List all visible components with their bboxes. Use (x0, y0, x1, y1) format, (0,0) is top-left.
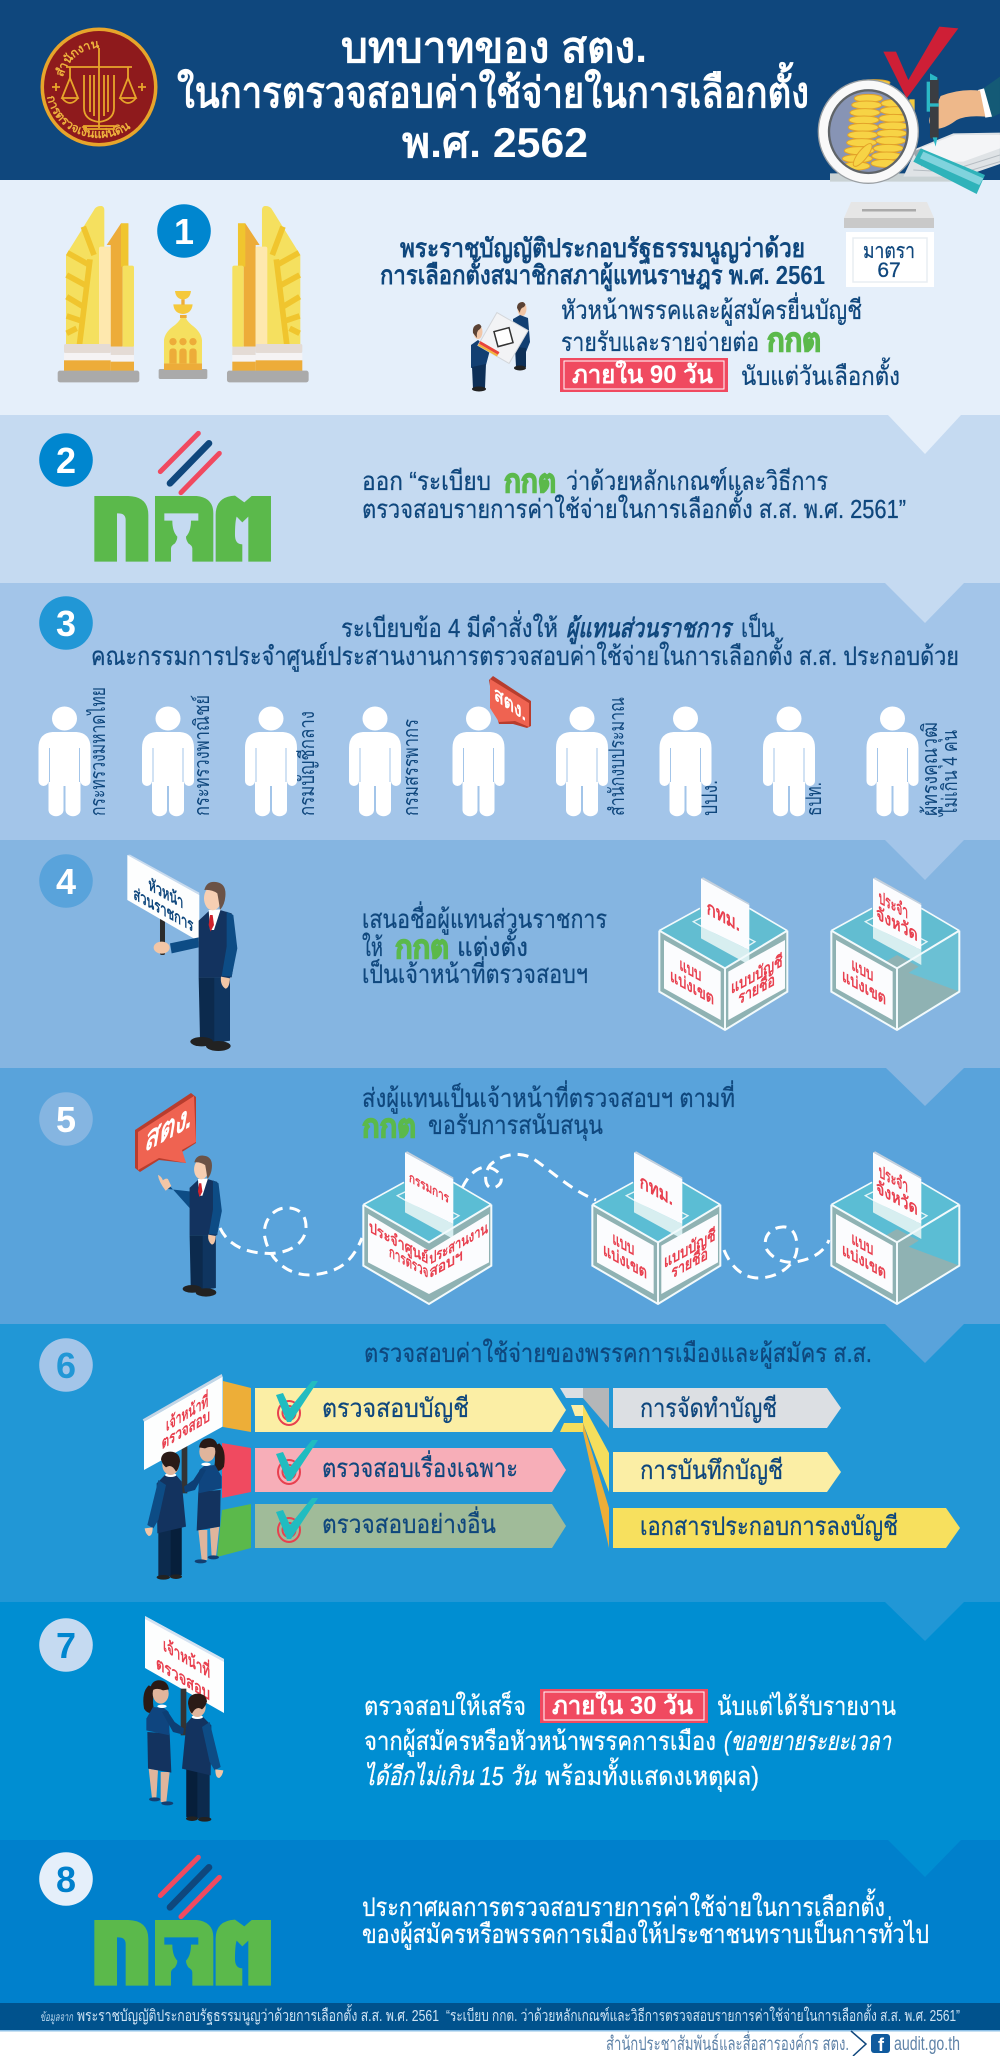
member: Budget Bureau (556, 697, 629, 816)
panel: step 5 background (0, 1068, 1000, 1324)
icon: ECT logo with flag (94, 1857, 271, 1986)
icon: centre tower (159, 291, 207, 379)
row: supporting documents: เอกสารประกอบการลงบัญชี (640, 1511, 898, 1541)
text: left face constituency (842, 954, 886, 1009)
text: province paper: ประจำ (879, 887, 908, 923)
icon: green tab (217, 1504, 251, 1557)
panel: step 2 content (39, 433, 906, 562)
arrow: step 1 to 2 (888, 415, 961, 454)
panel: step 1 content (58, 202, 934, 392)
icon: ECT inline logo: กกต (767, 322, 821, 358)
icon: number 7: 7 (56, 1625, 76, 1666)
icon: number 7 (39, 1618, 93, 1672)
row: recording: การบันทึกบัญชี (640, 1455, 783, 1485)
row: bookkeeping: การจัดทำบัญชี (640, 1393, 777, 1423)
text: left face constituency: แบบ (851, 1228, 873, 1259)
illustration: man holding sign (127, 855, 237, 1051)
member: Revenue Department (349, 706, 423, 816)
text: coordination centre faces: ประจำศูนย์ (369, 1217, 428, 1270)
text: left face constituency (842, 1228, 886, 1283)
text: nominate representatives (362, 901, 607, 989)
text: province paper (876, 1161, 918, 1219)
heading: act title: การเลือกตั้งสมาชิกสภาผู้แทนราษฎร พ.ศ. 2561 (380, 255, 825, 292)
text: sign officers: ตรวจสอบ (162, 1406, 210, 1453)
arrow: dashed path officer to centre box (220, 1208, 362, 1275)
icon: facebook (871, 2034, 890, 2055)
text: sources: พระราชบัญญัติประกอบรัฐธรรมนูญว่าด้วยการเลือกตั้ง ส.ส. พ.ศ. 2561 (77, 2004, 439, 2026)
heading: committee composition: เป็น (741, 612, 775, 643)
icon: speech bubble SAO (489, 676, 531, 728)
arrow: chevron divider (851, 2031, 866, 2056)
row: recording (613, 1452, 841, 1492)
text: complete audit: ตรวจสอบให้เสร็จ (364, 1690, 526, 1721)
heading: act title: พระราชบัญญัติประกอบรัฐธรรมนูญว่าด้วย (400, 233, 805, 266)
panel: step 3 background (0, 583, 1000, 840)
text: left face constituency: แบบ (679, 954, 701, 985)
icon: ballot box Bangkok (592, 1151, 720, 1304)
text: sign head of agency (133, 874, 194, 936)
panel: credit strip (0, 2030, 1000, 2056)
text: send representatives: ขอรับการสนับสนุน (428, 1110, 603, 1141)
text: submission requirement: หัวหน้าพรรคและผู้สมัครยื่นบัญชี (561, 292, 862, 326)
icon: magnifier over coins, check mark and hand (818, 27, 1000, 194)
icon: speech bubble SAO: สตง. (144, 1098, 192, 1159)
text: complete audit (364, 1690, 896, 1792)
icon: number 1: 1 (174, 211, 194, 252)
title: พ.ศ. 2562 (402, 119, 588, 166)
icon: two people exchanging documents (471, 302, 530, 392)
panel: step 2 background (0, 415, 1000, 583)
row: account audit: ตรวจสอบบัญชี (322, 1393, 469, 1423)
text: complete audit: จากผู้สมัครหรือหัวหน้าพรรคการเมือง (364, 1726, 716, 1757)
text: ECT regulation (362, 463, 906, 524)
text: Bangkok paper: กทม. (640, 1171, 673, 1210)
arrow: dashed path centre box to Bangkok box (462, 1154, 596, 1200)
text: complete audit: พร้อมทั้งแสดงเหตุผล) (545, 1757, 759, 1792)
illustration: SAO officer (158, 1156, 222, 1297)
text: right face party list: รายชื่อ (671, 1241, 708, 1282)
icon: ballot box province (831, 877, 959, 1030)
member: Bank of Thailand: ธปท. (803, 782, 826, 816)
icon: ballot box coordination centre (363, 1151, 491, 1304)
text: province paper (876, 887, 918, 945)
text: coordination centre faces: สอบฯ (429, 1247, 463, 1282)
text: nominate representatives: เป็นเจ้าหน้าที่ตรวจสอบฯ (362, 956, 588, 989)
text: send representatives: ส่งผู้แทนเป็นเจ้าหน้าที่ตรวจสอบฯ ตามที่ (362, 1080, 735, 1114)
text: Bangkok paper: กทม. (707, 897, 740, 936)
member: Revenue Department: กรมสรรพากร (400, 719, 423, 816)
icon: ballot box article 67: มาตรา (863, 240, 915, 263)
arrow: step 2 to 3 (885, 583, 964, 623)
text: ECT regulation: ออก “ระเบียบ (362, 466, 491, 496)
icon: number 2 (39, 433, 93, 487)
member: Bank of Thailand (763, 706, 826, 816)
heading: committee composition: ผู้แทนส่วนราชการ (566, 613, 734, 645)
title (177, 24, 809, 166)
icon: orange tab (223, 1381, 251, 1432)
text: complete audit: นับแต่ได้รับรายงาน (717, 1691, 896, 1721)
icon: number 3 (39, 596, 93, 650)
icon: target and check (276, 1381, 318, 1425)
callout: within 30 days: ภายใน 30 วัน (552, 1690, 693, 1720)
icon: ECT inline logo: กกต (504, 463, 556, 499)
icon: officers sign (145, 1616, 224, 1713)
text: coordination centre faces: ประสานงาน (429, 1219, 488, 1268)
icon: number 4 (39, 854, 93, 908)
text: submission requirement (561, 292, 900, 391)
text: left face constituency: แบ่งเขต (842, 966, 886, 1009)
text: left face constituency: แบบ (612, 1228, 634, 1259)
panel: step 6 background (0, 1324, 1000, 1602)
text: office credit: สำนักประชาสัมพันธ์และสื่อสารองค์กร สตง. (606, 2030, 849, 2055)
member: experts: ไม่เกิน 4 คน (938, 730, 962, 818)
text: province paper: ประจำ (879, 1161, 908, 1197)
row: supporting documents (613, 1508, 960, 1548)
icon: target and check (276, 1440, 318, 1484)
text: committee paper: กรรมการ (409, 1170, 449, 1207)
icon: number 1 (157, 204, 211, 258)
member: AMLO: ปปง. (699, 780, 722, 816)
icon: number 3: 3 (56, 603, 76, 644)
icon: ballot box article 67: 67 (877, 259, 901, 282)
text: right face party list: แบบบัญชี (731, 951, 783, 999)
icon: number 2: 2 (56, 440, 76, 481)
member: State Audit Office (452, 676, 531, 816)
member: Ministry of Commerce: กระทรวงพาณิชย์ (190, 695, 214, 816)
heading: committee composition: ระเบียบข้อ 4 มีคำสั่งให้ (341, 610, 558, 643)
row: account audit (255, 1381, 566, 1432)
text: province paper: จังหวัด (876, 902, 918, 945)
text: announce results: ประกาศผลการตรวจสอบรายการค่าใช้จ่ายในการเลือกตั้ง (362, 1888, 885, 1922)
icon: facebook: f (878, 2035, 885, 2055)
heading: act title (380, 233, 825, 292)
text: coordination centre faces (369, 1217, 488, 1282)
icon: number 6: 6 (56, 1345, 76, 1386)
row: specific audit: ตรวจสอบเรื่องเฉพาะ (322, 1450, 518, 1483)
icon: ballot box province (831, 1151, 959, 1304)
icon: number 5: 5 (56, 1099, 76, 1140)
text: nominate representatives: ให้ (362, 932, 383, 962)
icon: speech bubble SAO (135, 1093, 196, 1172)
arrow: step 7 to 8 (888, 1840, 961, 1877)
arrow: step 4 to 5 (886, 1068, 964, 1106)
member: Budget Bureau: สำนักงบประมาณ (606, 697, 629, 816)
text: submission requirement: นับแต่วันเลือกตั้ง (741, 357, 900, 391)
text: left face constituency: แบ่งเขต (842, 1240, 886, 1283)
text: sign officers (162, 1388, 210, 1453)
member: Comptroller General (245, 706, 319, 816)
panel: step 6 content (39, 1338, 960, 1580)
text: complete audit: (ขอขยายระยะเวลา (724, 1726, 892, 1756)
text: ECT regulation: ว่าด้วยหลักเกณฑ์และวิธีการ (566, 466, 828, 496)
title: ในการตรวจสอบค่าใช้จ่ายในการเลือกตั้ง (177, 61, 809, 116)
heading: committee composition (91, 610, 959, 672)
icon: officers sign: ตรวจสอบ (156, 1652, 210, 1704)
member: experts: ผู้ทรงคุณวุฒิ (919, 722, 943, 816)
arrow: dashed path Bangkok box to province box (724, 1227, 829, 1278)
text: send representatives (362, 1080, 735, 1144)
icon: audit office seal: สำนักงาน (55, 41, 100, 76)
icon: officers sign: เจ้าหน้าที่ (163, 1632, 210, 1682)
icon: number 5 (39, 1092, 93, 1146)
connector: yellow to recording (571, 1405, 609, 1492)
icon: speech bubble SAO: สตง. (494, 681, 526, 726)
icon: number 6 (39, 1338, 93, 1392)
text: nominate representatives: แต่งตั้ง (457, 928, 528, 962)
icon: red tab (222, 1443, 251, 1498)
icon: ballot box article 67 (844, 202, 934, 287)
text: right face party list: รายชื่อ (738, 967, 775, 1008)
text: sign head of agency: ส่วนราชการ (133, 884, 194, 936)
panel: step 8 background (0, 1840, 1000, 2003)
member: Ministry of Commerce (142, 695, 214, 816)
icon: ECT logo with flag (94, 433, 271, 562)
text: sources (40, 2004, 960, 2026)
member: Ministry of Interior (38, 687, 110, 816)
row: bookkeeping (613, 1388, 841, 1428)
panel: step 7 background (0, 1602, 1000, 1840)
member: Comptroller General: กรมบัญชีกลาง (296, 711, 319, 816)
text: sources: ข้อมูลจาก (40, 2010, 73, 2025)
row: other audit (255, 1498, 566, 1548)
icon: audit office seal: การตรวจเงินแผ่นดิน (46, 96, 130, 138)
text: sign officers: เจ้าหน้าที่ (166, 1388, 208, 1435)
member: experts (866, 706, 962, 818)
text: submission requirement: รายรับและรายจ่ายต่อ (561, 327, 759, 357)
panel: step 1 background (0, 180, 1000, 415)
panel: step 8 content (39, 1852, 929, 1986)
heading: audit expenses: ตรวจสอบค่าใช้จ่ายของพรรคการเมืองและผู้สมัคร ส.ส. (364, 1338, 872, 1369)
connector: gray to bookkeeping (560, 1388, 609, 1428)
header (0, 0, 1000, 194)
icon: right wing (227, 206, 309, 382)
text: right face party list (664, 1225, 716, 1282)
panel: step 3 content (38, 596, 962, 818)
text: right face party list (731, 951, 783, 1008)
row: other audit: ตรวจสอบอย่างอื่น (322, 1506, 496, 1539)
text: announce results (362, 1888, 929, 1950)
text: province paper: จังหวัด (876, 1176, 918, 1219)
text: left face constituency: แบบ (851, 954, 873, 985)
member: AMLO (660, 706, 722, 816)
icon: ECT inline logo: กกต (362, 1108, 416, 1144)
icon: number 4: 4 (56, 861, 76, 902)
icon: number 8 (39, 1852, 93, 1906)
icon: democracy monument (58, 206, 309, 382)
panel: step 4 background (0, 840, 1000, 1068)
title: บทบาทของ สตง. (341, 24, 647, 71)
text: left face constituency (670, 954, 714, 1009)
callout: within 90 days: ภายใน 90 วัน (572, 359, 713, 389)
icon: left wing (58, 206, 139, 382)
text: complete audit: ได้อีกไม่เกิน 15 วัน (364, 1761, 537, 1791)
illustration: officers (143, 1680, 223, 1822)
text: nominate representatives: เสนอชื่อผู้แทนส่วนราชการ (362, 901, 607, 935)
illustration: officers with sign (143, 1374, 225, 1580)
text: ECT regulation: ตรวจสอบรายการค่าใช้จ่ายในการเลือกตั้ง ส.ส. พ.ศ. 2561” (362, 490, 906, 524)
icon: number 8: 8 (56, 1859, 76, 1900)
icon: audit office seal (40, 28, 158, 146)
panel: step 4 content (39, 854, 959, 1051)
text: coordination centre faces: การตรวจ (389, 1243, 428, 1282)
icon: target and check (276, 1498, 318, 1542)
text: sign head of agency: หัวหน้า (148, 874, 183, 912)
text: right face party list: แบบบัญชี (664, 1225, 716, 1273)
arrow: step 3 to 4 (885, 840, 964, 880)
text: website: audit.go.th (894, 2034, 960, 2055)
text: left face constituency (603, 1228, 647, 1283)
panel: step 7 content (39, 1616, 896, 1822)
icon: ECT inline logo: กกต (395, 929, 449, 965)
icon: ballot box Bangkok (659, 877, 787, 1030)
text: left face constituency: แบ่งเขต (670, 966, 714, 1009)
connector: orange to documents (560, 1423, 609, 1548)
arrow: step 5 to 6 (885, 1324, 964, 1363)
arrow: step 6 to 7 (885, 1602, 964, 1641)
member: Ministry of Interior: กระทรวงมหาดไทย (86, 687, 110, 816)
panel: source footer (0, 2003, 1000, 2032)
panel: step 5 content (39, 1080, 959, 1304)
row: specific audit (255, 1440, 566, 1492)
text: left face constituency: แบ่งเขต (603, 1240, 647, 1283)
